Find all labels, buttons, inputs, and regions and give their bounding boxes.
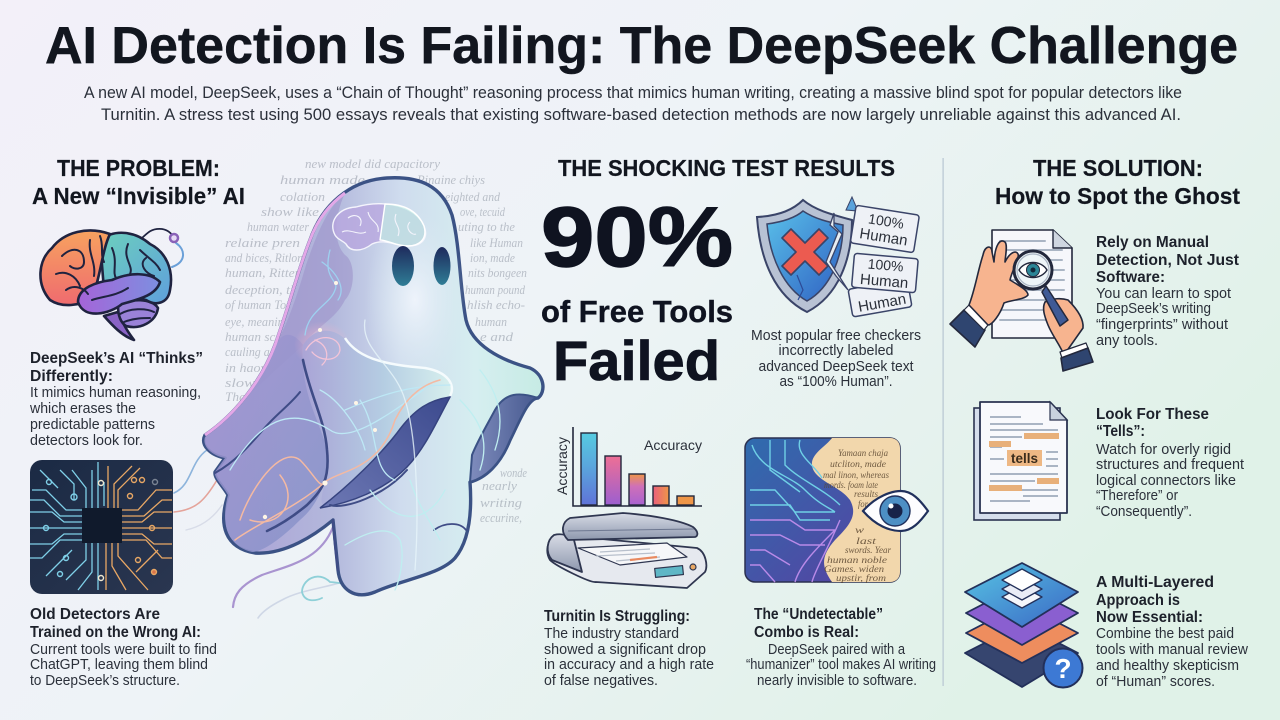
handwriting background: Pinaine chiys xyxy=(416,173,485,187)
icon: hands with magnifier over document xyxy=(950,230,1093,371)
panel: the solution xyxy=(950,155,1248,690)
text: undetectable combo: Combo is Real: xyxy=(754,624,859,641)
handwriting background: slow xyxy=(225,376,256,390)
text: free checkers: as “100% Human”. xyxy=(780,374,892,390)
text: old detectors: Trained on the Wrong AI: xyxy=(30,624,201,641)
label: 100% Human middle xyxy=(852,253,918,293)
handwriting background: like Human xyxy=(470,236,523,250)
handwriting background: ove, tecuid xyxy=(460,205,506,219)
handwriting background: human xyxy=(475,315,507,329)
text: tells: Look For These xyxy=(1096,406,1209,423)
handwriting background: cauling ae xyxy=(225,345,275,359)
statistic label: of free tools: of Free Tools xyxy=(541,294,733,329)
handwriting background: new model did capacitory xyxy=(305,157,440,171)
handwriting background: wonde xyxy=(500,466,527,480)
ghost neural lines xyxy=(230,250,500,590)
label: 100% Human front: 100% xyxy=(867,210,905,232)
handwriting background: eighted and xyxy=(445,190,501,204)
text: tells: “Consequently”. xyxy=(1096,504,1192,520)
handwriting background: ion, made xyxy=(470,251,515,265)
text: undetectable combo: “humanizer” tool makes AI writing xyxy=(746,657,936,673)
icon: scanner xyxy=(547,513,706,588)
text: old detectors: to DeepSeek’s structure. xyxy=(30,673,180,689)
ghost right drape underside xyxy=(470,394,538,482)
text: undetectable combo: nearly invisible to software. xyxy=(757,673,917,689)
text: DeepSeek's AI thinks differently: Differently: xyxy=(30,368,113,385)
text: manual detection: You can learn to spot xyxy=(1096,286,1231,302)
handwriting background: writing xyxy=(480,496,522,510)
panel: the problem xyxy=(29,155,245,689)
text: tells: structures and frequent xyxy=(1096,457,1244,473)
handwriting background: deception, th xyxy=(225,283,297,297)
handwriting background: human, Ritter xyxy=(225,266,300,280)
big statistic: 90 percent: 90% xyxy=(541,190,733,284)
text: tells: Watch for overly rigid xyxy=(1096,442,1231,458)
icon: circuit to handwriting with eye: Yamaan chaja xyxy=(838,449,888,459)
question mark badge: ? xyxy=(1054,653,1072,684)
text: Turnitin is struggling: Turnitin Is Struggling: xyxy=(544,608,690,625)
text: undetectable combo xyxy=(746,606,936,689)
handwriting background: relaine pren xyxy=(225,236,300,250)
label: 100% Human back xyxy=(848,279,912,317)
ghost left shadow in head xyxy=(205,193,353,435)
icon: colorful brain xyxy=(40,229,183,340)
text: undetectable combo: The “Undetectable” xyxy=(754,606,883,623)
handwriting background: The xyxy=(225,390,245,404)
heading: test results: THE SHOCKING TEST RESULTS xyxy=(558,155,895,181)
text: old detectors: Current tools were built to find xyxy=(30,642,217,658)
heading: the solution xyxy=(995,155,1240,209)
text: tells: logical connectors like xyxy=(1096,473,1236,489)
icon: circuit to handwriting with eye: w xyxy=(855,526,865,536)
text: manual detection xyxy=(1096,234,1239,349)
text: multi-layered approach xyxy=(1096,574,1248,690)
icon: circuit to handwriting with eye: mords. foam late xyxy=(824,480,878,491)
text: multi-layered approach: of “Human” scores. xyxy=(1096,674,1215,690)
icon: document with tells highlights: tells xyxy=(1011,451,1038,466)
text: multi-layered approach: Now Essential: xyxy=(1096,609,1203,626)
text: DeepSeek's AI thinks differently: DeepSeek’s AI “Thinks” xyxy=(30,350,203,367)
heading: the problem xyxy=(32,155,245,209)
text: multi-layered approach: A Multi-Layered xyxy=(1096,574,1214,591)
ghost eyes xyxy=(392,246,450,286)
handwriting background: and bices, Ritlon xyxy=(225,251,303,265)
text: DeepSeek's AI thinks differently: detectors look for. xyxy=(30,433,143,449)
divider xyxy=(942,158,944,686)
icon: layered stack with question mark xyxy=(965,563,1082,688)
icon: circuit to handwriting with eye: upstir, from xyxy=(836,573,886,584)
handwriting background: nearly xyxy=(482,479,517,493)
text: old detectors: Old Detectors Are xyxy=(30,606,160,623)
handwriting background: human made xyxy=(280,173,366,187)
icon: circuit to handwriting with eye xyxy=(745,438,928,584)
subtitle text block: Turnitin. A stress test using 500 essays reveals that existing software-based detection methods are now largely unreliable against this advanced AI. xyxy=(101,105,1181,124)
title: AI Detection Is Failing: The DeepSeek Challenge xyxy=(45,17,1238,75)
handwriting background: human water xyxy=(247,220,309,234)
chart: accuracy decline: Accuracy xyxy=(644,437,702,453)
icon: circuit to handwriting with eye: swords. Year xyxy=(845,546,891,556)
text: Turnitin is struggling: in accuracy and a high rate xyxy=(544,657,714,673)
text: DeepSeek's AI thinks differently: which erases the xyxy=(29,401,136,417)
handwriting background: hlish echo- xyxy=(467,298,525,312)
label: 100% Human front xyxy=(850,205,919,253)
subtitle text block xyxy=(84,83,1182,124)
heading: the solution: THE SOLUTION: xyxy=(1033,155,1203,181)
label: 100% Human middle: Human xyxy=(859,271,909,292)
handwriting background: colation xyxy=(280,190,325,204)
ghost shoulder pink glow xyxy=(294,321,350,369)
panel: test results xyxy=(541,155,936,689)
text: manual detection: DeepSeek’s writing xyxy=(1096,301,1211,317)
icon: circuit to handwriting with eye: for xyxy=(858,499,868,510)
ghost trailing wires xyxy=(174,450,382,618)
text: Turnitin is struggling xyxy=(544,608,714,689)
icon: circuit to handwriting with eye: Games. widen xyxy=(824,565,884,575)
label: 100% Human middle: 100% xyxy=(867,255,904,275)
text: tells: “Tells”: xyxy=(1096,423,1145,440)
text: multi-layered approach: tools with manual review xyxy=(1096,642,1248,658)
icon: circuit to handwriting with eye: last xyxy=(856,537,877,547)
label: 100% Human back: Human xyxy=(857,291,907,316)
text: DeepSeek's AI thinks differently xyxy=(29,350,203,449)
chart: accuracy decline: Accuracy xyxy=(554,437,570,495)
chart: accuracy decline xyxy=(554,427,702,506)
text: tells xyxy=(1096,406,1244,520)
text: old detectors: ChatGPT, leaving them blind xyxy=(30,657,208,673)
text: free checkers: incorrectly labeled xyxy=(778,343,894,359)
ghost front sleeve xyxy=(303,331,452,505)
icon: circuit to handwriting with eye: utcliton, made xyxy=(830,460,886,470)
text: DeepSeek's AI thinks differently: predictable patterns xyxy=(30,417,155,433)
heading: the problem: THE PROBLEM: xyxy=(57,155,220,181)
ghost body xyxy=(204,178,543,595)
handwriting background: nits bongeen xyxy=(468,266,527,280)
handwriting background: uting to the xyxy=(458,220,515,234)
text: Turnitin is struggling: showed a significant drop xyxy=(544,642,706,658)
ghost glowing brain xyxy=(333,204,426,250)
text: undetectable combo: DeepSeek paired with a xyxy=(768,642,906,658)
handwriting background: eye, meaning xyxy=(225,315,290,329)
heading: the problem: A New “Invisible” AI xyxy=(32,183,245,209)
handwriting background: in haow xyxy=(225,361,271,375)
ghost left drape xyxy=(204,335,327,552)
text: tells: “Therefore” or xyxy=(1096,488,1178,504)
text: multi-layered approach: Combine the best paid xyxy=(1096,626,1234,642)
icon: document with tells highlights xyxy=(974,402,1067,520)
text: free checkers: advanced DeepSeek text xyxy=(758,359,914,375)
text: multi-layered approach: and healthy skepticism xyxy=(1096,658,1239,674)
text: free checkers xyxy=(751,328,921,390)
handwriting background: human pound xyxy=(465,283,526,297)
icon: circuit to handwriting with eye: human noble xyxy=(827,556,887,566)
ghost sparkle nodes xyxy=(263,281,377,519)
ghost sleeve underside xyxy=(320,397,450,508)
text: manual detection: Software: xyxy=(1096,269,1165,286)
label: 100% Human front: Human xyxy=(858,225,909,250)
handwriting background: show like xyxy=(261,205,320,219)
text: manual detection: Detection, Not Just xyxy=(1096,252,1239,269)
subtitle text block: A new AI model, DeepSeek, uses a “Chain of Thought” reasoning process that mimics human writing, creating a massive blind spot for popular detectors like xyxy=(84,83,1182,102)
illustration: translucent ghost xyxy=(174,178,543,618)
ghost pink edge xyxy=(205,193,345,435)
icon: cracked shield with human labels xyxy=(757,197,919,317)
text: manual detection: “fingerprints” without xyxy=(1096,317,1228,333)
text: Turnitin is struggling: The industry standard xyxy=(544,626,679,642)
handwriting background: of human Tom xyxy=(225,298,295,312)
text: DeepSeek's AI thinks differently: It mimics human reasoning, xyxy=(30,385,201,401)
handwriting background: human sco xyxy=(225,330,282,344)
text: free checkers: Most popular free checkers xyxy=(751,328,921,344)
text: Turnitin is struggling: of false negatives. xyxy=(544,673,658,689)
heading: the solution: How to Spot the Ghost xyxy=(995,183,1240,209)
handwriting background: e and xyxy=(480,330,514,344)
handwriting background: eccurine, xyxy=(480,511,522,525)
text: multi-layered approach: Approach is xyxy=(1096,592,1180,609)
statistic label: failed: Failed xyxy=(553,329,720,392)
text: manual detection: Rely on Manual xyxy=(1096,234,1209,251)
ghost fold seams xyxy=(215,360,466,570)
handwriting background xyxy=(225,157,527,525)
text: manual detection: any tools. xyxy=(1096,333,1158,349)
ghost face glow xyxy=(365,210,465,390)
icon: circuit to handwriting with eye: mal linon, whereas xyxy=(823,471,889,481)
text: old detectors xyxy=(30,606,217,689)
icon: circuit chip xyxy=(30,460,173,594)
icon: circuit to handwriting with eye: results xyxy=(854,490,878,500)
